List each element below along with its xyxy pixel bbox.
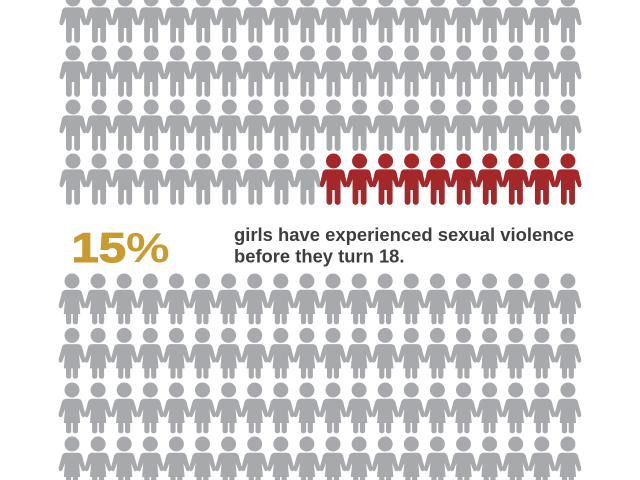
boys row 4: grey figures [59, 154, 321, 205]
girls row 4 [59, 436, 581, 480]
boys row 4: red highlighted figures [320, 154, 581, 205]
boys row 2 [59, 46, 581, 97]
girls row 3 [59, 382, 581, 433]
boys row 3 [59, 100, 581, 151]
boys row 1 [59, 0, 581, 43]
statement text [234, 225, 574, 267]
statement text: before they turn 18. [234, 247, 404, 267]
statement text: girls have experienced sexual violence [234, 225, 574, 245]
girls row 1 [59, 274, 581, 324]
big percentage: 15% [72, 224, 170, 271]
girls row 2 [59, 328, 581, 379]
